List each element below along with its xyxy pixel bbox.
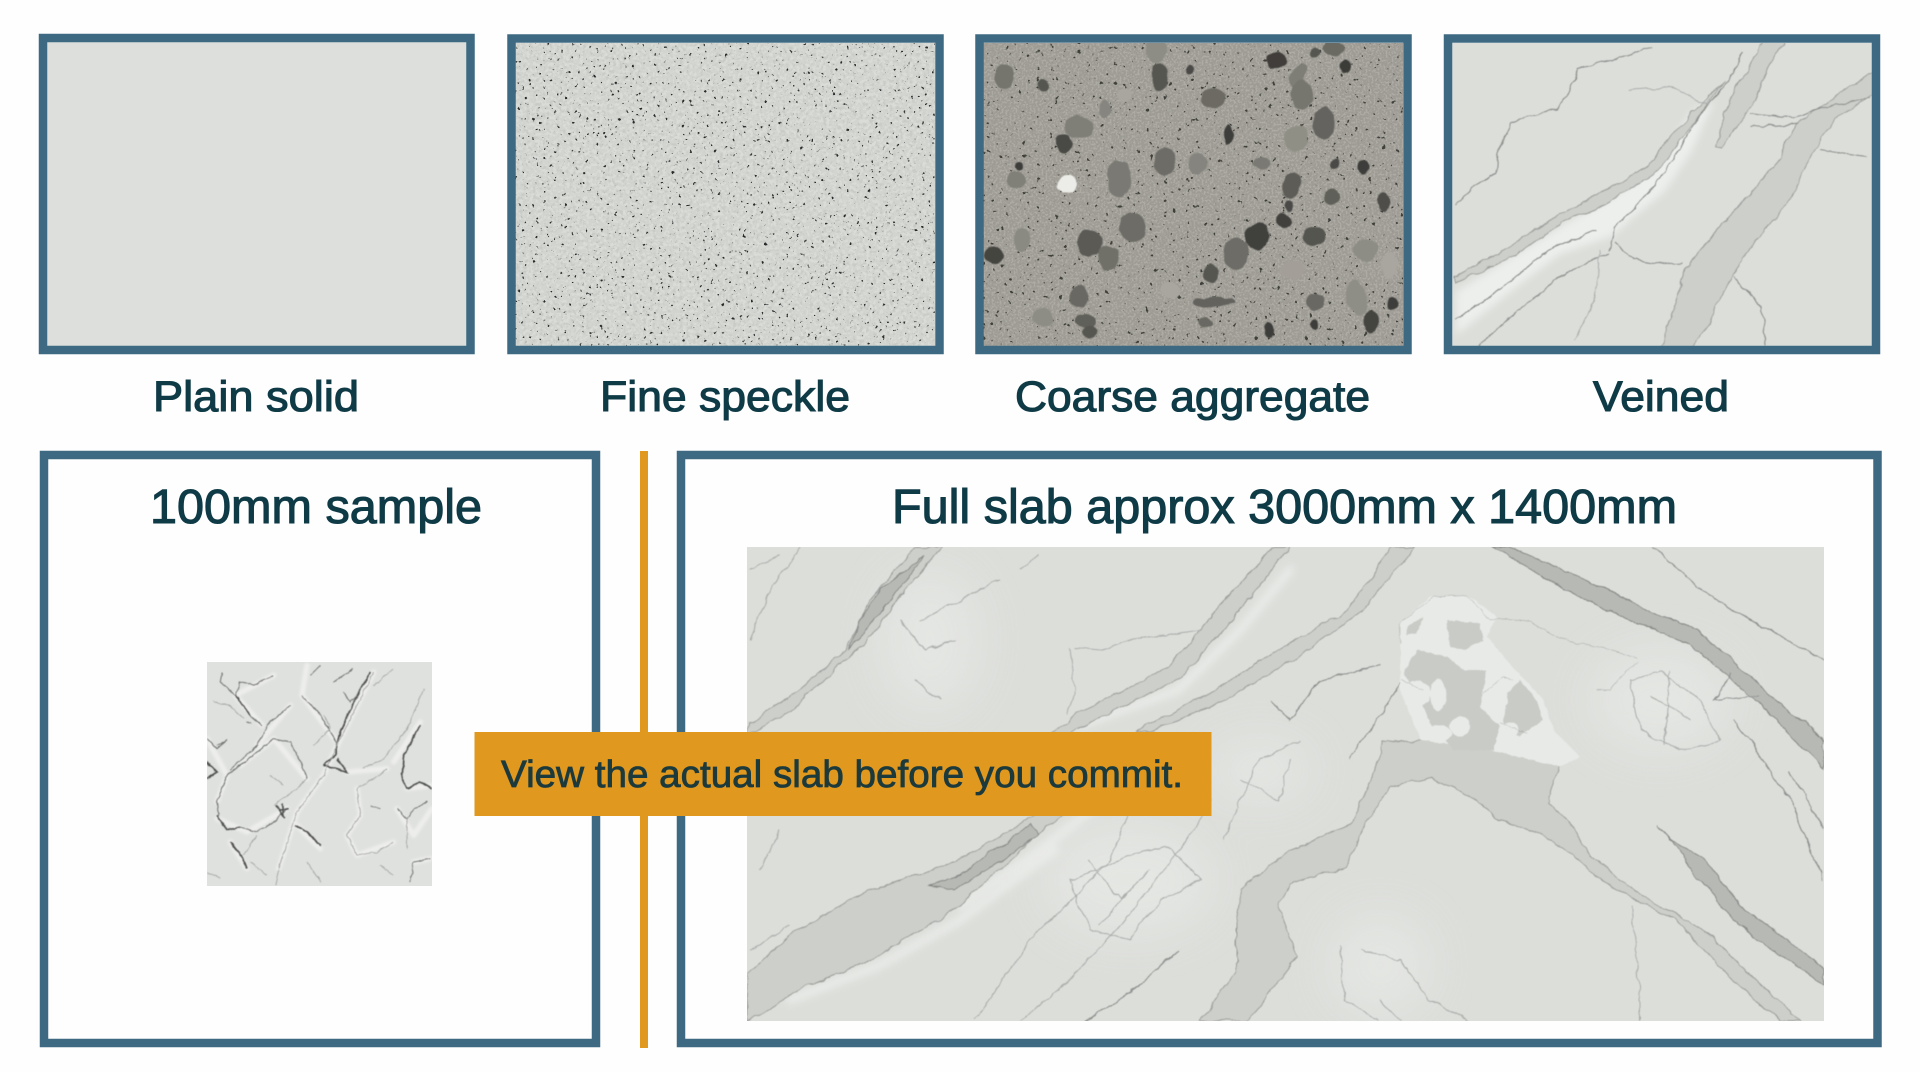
panel: 100mm sample — [44, 455, 596, 1043]
callout text: View the actual slab before you commit. — [501, 754, 1183, 796]
swatch: fine speckle surface — [512, 38, 940, 350]
panel: fine speckle — [512, 38, 940, 421]
frame: slab panel — [681, 455, 1878, 1043]
panel: full slab — [681, 455, 1878, 1043]
label: plain solid: Plain solid — [153, 373, 359, 421]
heading: 100mm sample: 100mm sample — [150, 481, 482, 534]
label: coarse aggregate: Coarse aggregate — [1015, 373, 1370, 421]
central blotch with white inclusions — [1400, 595, 1638, 767]
image: full marble slab — [747, 547, 1824, 1021]
swatch: plain solid surface — [43, 38, 470, 350]
divider: orange vertical line — [640, 451, 648, 1048]
callout: view the actual slab — [474, 732, 1212, 816]
heading: full slab size: Full slab approx 3000mm x 1400mm — [892, 481, 1677, 534]
swatch: veined marble surface — [1448, 38, 1876, 352]
panel: plain solid — [43, 38, 470, 421]
swatch: coarse aggregate surface — [980, 38, 1408, 350]
panel: veined — [1448, 38, 1876, 421]
marbled light patches — [910, 608, 1692, 980]
label: fine speckle: Fine speckle — [600, 373, 850, 421]
frame: sample panel — [44, 455, 596, 1043]
image: small marble sample — [207, 662, 432, 886]
panel: coarse aggregate — [980, 38, 1408, 421]
label: veined: Veined — [1593, 373, 1729, 421]
